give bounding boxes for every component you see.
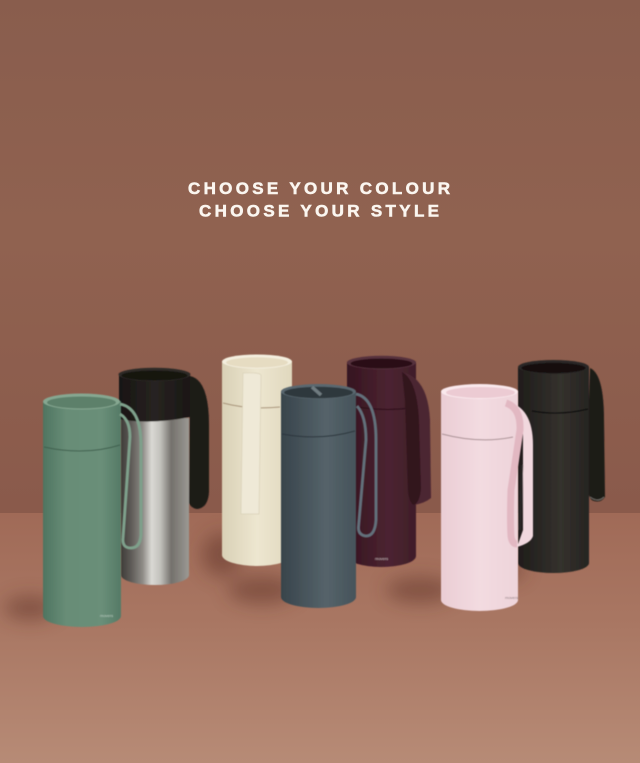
cream mug	[222, 354, 292, 566]
grey mug	[281, 384, 376, 608]
headline: CHOOSE YOUR STYLE	[199, 202, 439, 220]
pink mug: movers	[505, 595, 518, 600]
pink mug	[441, 384, 533, 611]
background wall	[0, 0, 640, 514]
black mug	[518, 360, 605, 573]
steel mug	[118, 368, 209, 585]
plum mug	[347, 356, 431, 567]
headline: CHOOSE YOUR COLOUR	[188, 179, 450, 198]
plum mug: movers	[375, 556, 388, 561]
green mug: movers	[100, 613, 113, 618]
green mug	[43, 394, 141, 627]
floor shadows	[4, 533, 525, 620]
floor surface	[0, 513, 640, 763]
headline	[188, 179, 450, 220]
